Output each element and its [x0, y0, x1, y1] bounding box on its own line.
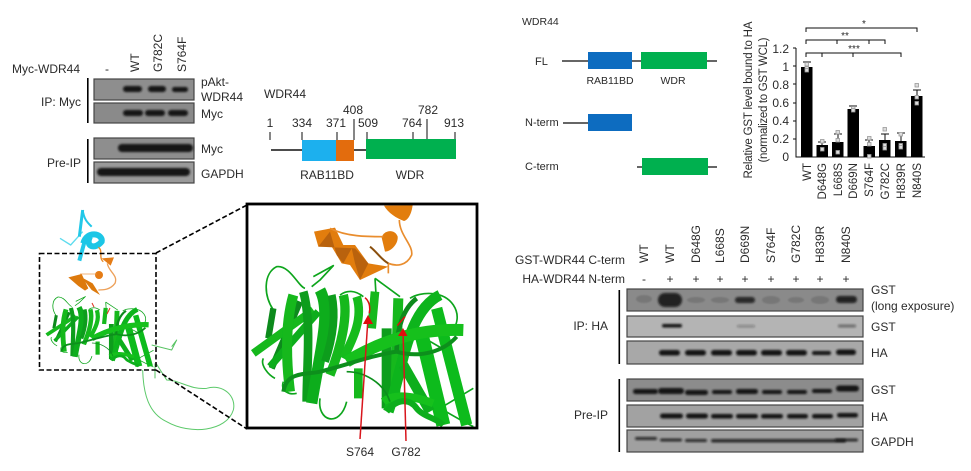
blot: Myc pre-IP [94, 138, 194, 159]
x axis labels: G782C [880, 163, 892, 199]
construct: FL: FL [535, 56, 548, 68]
lane headers: WT [663, 244, 677, 263]
x axis labels: D648G [817, 163, 829, 199]
heading: WDR44 constructs: WDR44 [522, 16, 559, 28]
blot antibody labels: WDR44 [201, 90, 243, 104]
blot antibody labels: GST [871, 320, 896, 334]
x axis labels: D669N [848, 163, 860, 199]
x axis labels: S764F [864, 163, 876, 197]
x axis labels: N840S [912, 163, 924, 198]
y axis ticks [772, 42, 789, 164]
bracket lines and group labels [573, 290, 620, 452]
panel: WDR44 constructs [522, 16, 717, 175]
lane headers: - [642, 272, 646, 286]
bracket lines and group labels: Pre-IP [47, 156, 81, 170]
construct: N-term: N-term [525, 117, 559, 129]
panel: WDR44 domain map [264, 87, 464, 182]
blot antibody labels: GST [871, 383, 896, 397]
y axis ticks: 0.8 [772, 78, 789, 92]
y axis ticks: 0.2 [772, 132, 789, 146]
blot antibody labels: (long exposure) [871, 299, 954, 313]
residue numbers: 371 [326, 116, 346, 130]
construct: C-term: C-term [525, 161, 559, 173]
red sites of the small model [92, 303, 110, 314]
lane headers: + [666, 272, 674, 286]
construct: FL: WDR [660, 75, 686, 87]
residue numbers: 764 [402, 116, 422, 130]
blot antibody labels: GAPDH [871, 435, 914, 449]
lane headers: GST-WDR44 C-term [515, 253, 625, 267]
lane headers: H839R [813, 225, 827, 263]
lane headers: + [792, 272, 800, 286]
lane headers: + [816, 272, 824, 286]
domain labels: WDR [396, 168, 425, 182]
construct: FL [535, 52, 717, 87]
bars [801, 62, 922, 157]
construct: FL: RAB11BD [586, 75, 634, 87]
residue numbers: 1 [267, 116, 274, 130]
zoomed ribbon structure [253, 205, 473, 427]
lane headers [515, 225, 853, 286]
blot antibody labels: GAPDH [201, 167, 244, 181]
y axis ticks: 1 [782, 60, 789, 74]
heading: Myc-WDR44 lane header: - [105, 62, 109, 76]
zoom box frame [247, 204, 477, 428]
green WDR ribbon [253, 266, 473, 427]
bracket lines and group labels: IP: Myc [41, 95, 81, 109]
green WDR of the small model [47, 297, 153, 367]
lane headers: D648G [689, 225, 703, 263]
residue numbers [267, 103, 464, 130]
blot antibody labels: HA [871, 410, 888, 424]
heading: Myc-WDR44 lane header: G782C [151, 34, 165, 72]
arrow: S764 [360, 315, 373, 439]
panel: full-length protein structure [47, 210, 234, 430]
cyan, orange and tail of the small model [60, 210, 234, 430]
construct: C-term [525, 158, 717, 175]
domain labels [300, 168, 425, 182]
residue numbers: 782 [418, 103, 438, 117]
y axis ticks: 0.6 [772, 96, 789, 110]
blot antibody labels: HA [871, 346, 888, 360]
significance brackets: *** [848, 44, 860, 55]
panel: zoomed protein structure [247, 204, 477, 459]
y axis title: Relative GST level bound to HA [743, 21, 755, 178]
lane headers: + [716, 272, 724, 286]
red mutation sites [365, 298, 405, 326]
residue numbers: 408 [343, 103, 363, 117]
x axis labels: L668S [833, 163, 845, 196]
lane headers: S764F [764, 228, 778, 263]
domain labels: RAB11BD [300, 168, 354, 182]
lane headers: G782C [789, 225, 803, 263]
blot: GST long exposure [627, 289, 863, 311]
residue tick marks [270, 119, 455, 140]
bracket lines and group labels [41, 78, 89, 183]
heading: Myc-WDR44 lane header: WT [128, 53, 142, 72]
data points [805, 62, 918, 158]
heading: Myc-WDR44 lane header: S764F [175, 37, 189, 72]
blot: GST short exposure [627, 316, 863, 337]
x axis labels: H839R [896, 163, 908, 199]
blot: HA IP [627, 341, 863, 364]
bar chart: relative GST bound to HA [743, 19, 925, 199]
arrow: G782 [398, 328, 408, 441]
residue labels [346, 445, 421, 459]
panel: Myc-WDR44 western blot [12, 34, 244, 183]
lane headers: + [842, 272, 850, 286]
lane headers: D669N [738, 226, 752, 263]
residue labels: S764 [346, 445, 374, 459]
lane headers: N840S [839, 226, 853, 263]
residue numbers: 509 [358, 116, 378, 130]
significance brackets: * [862, 19, 866, 30]
blot antibody labels: pAkt- [201, 75, 229, 89]
blot antibody labels: GST [871, 283, 896, 297]
x axis labels [802, 163, 924, 199]
blot: pAkt-WDR44 [94, 79, 194, 100]
lane headers: L668S [713, 228, 727, 263]
blot antibody labels [201, 75, 244, 181]
significance brackets [806, 19, 917, 57]
orange RAB11BD ribbon [314, 205, 413, 280]
blot: Myc IP [94, 103, 194, 123]
heading: Myc-WDR44 lane header [12, 34, 189, 76]
construct: N-term [525, 114, 632, 131]
y axis title [743, 21, 770, 178]
residue numbers: 334 [292, 116, 312, 130]
y axis title: (normalized to GST WCL) [758, 37, 770, 162]
bracket lines and group labels: IP: HA [573, 319, 608, 333]
residue labels: G782 [391, 445, 421, 459]
blot: GAPDH [94, 162, 194, 183]
blot: GST pre-IP [627, 379, 863, 401]
panel: GST-WDR44 C-term western blot [515, 225, 954, 452]
axes [793, 48, 925, 157]
domain bar [271, 139, 456, 161]
y axis ticks: 0.4 [772, 114, 789, 128]
significance brackets: ** [841, 31, 849, 42]
lane headers: + [692, 272, 700, 286]
heading: Myc-WDR44 lane header: Myc-WDR44 [12, 62, 80, 76]
y axis ticks: 0 [782, 150, 789, 164]
blot antibody labels: Myc [201, 142, 223, 156]
blot antibody labels: Myc [201, 107, 223, 121]
lane headers: + [741, 272, 749, 286]
blot antibody labels [871, 283, 954, 449]
bracket lines and group labels: Pre-IP [574, 408, 608, 422]
lane headers: + [767, 272, 775, 286]
residue numbers: 913 [444, 116, 464, 130]
x axis labels: WT [802, 163, 814, 181]
blot: GAPDH pre-IP [627, 430, 863, 452]
blot: HA pre-IP [627, 405, 863, 427]
heading: WDR44: WDR44 [264, 87, 306, 101]
dashed zoom box and connector lines [40, 205, 247, 429]
lane headers: WT [637, 244, 651, 263]
y axis ticks: 1.2 [772, 42, 789, 56]
lane headers: HA-WDR44 N-term [522, 272, 625, 286]
